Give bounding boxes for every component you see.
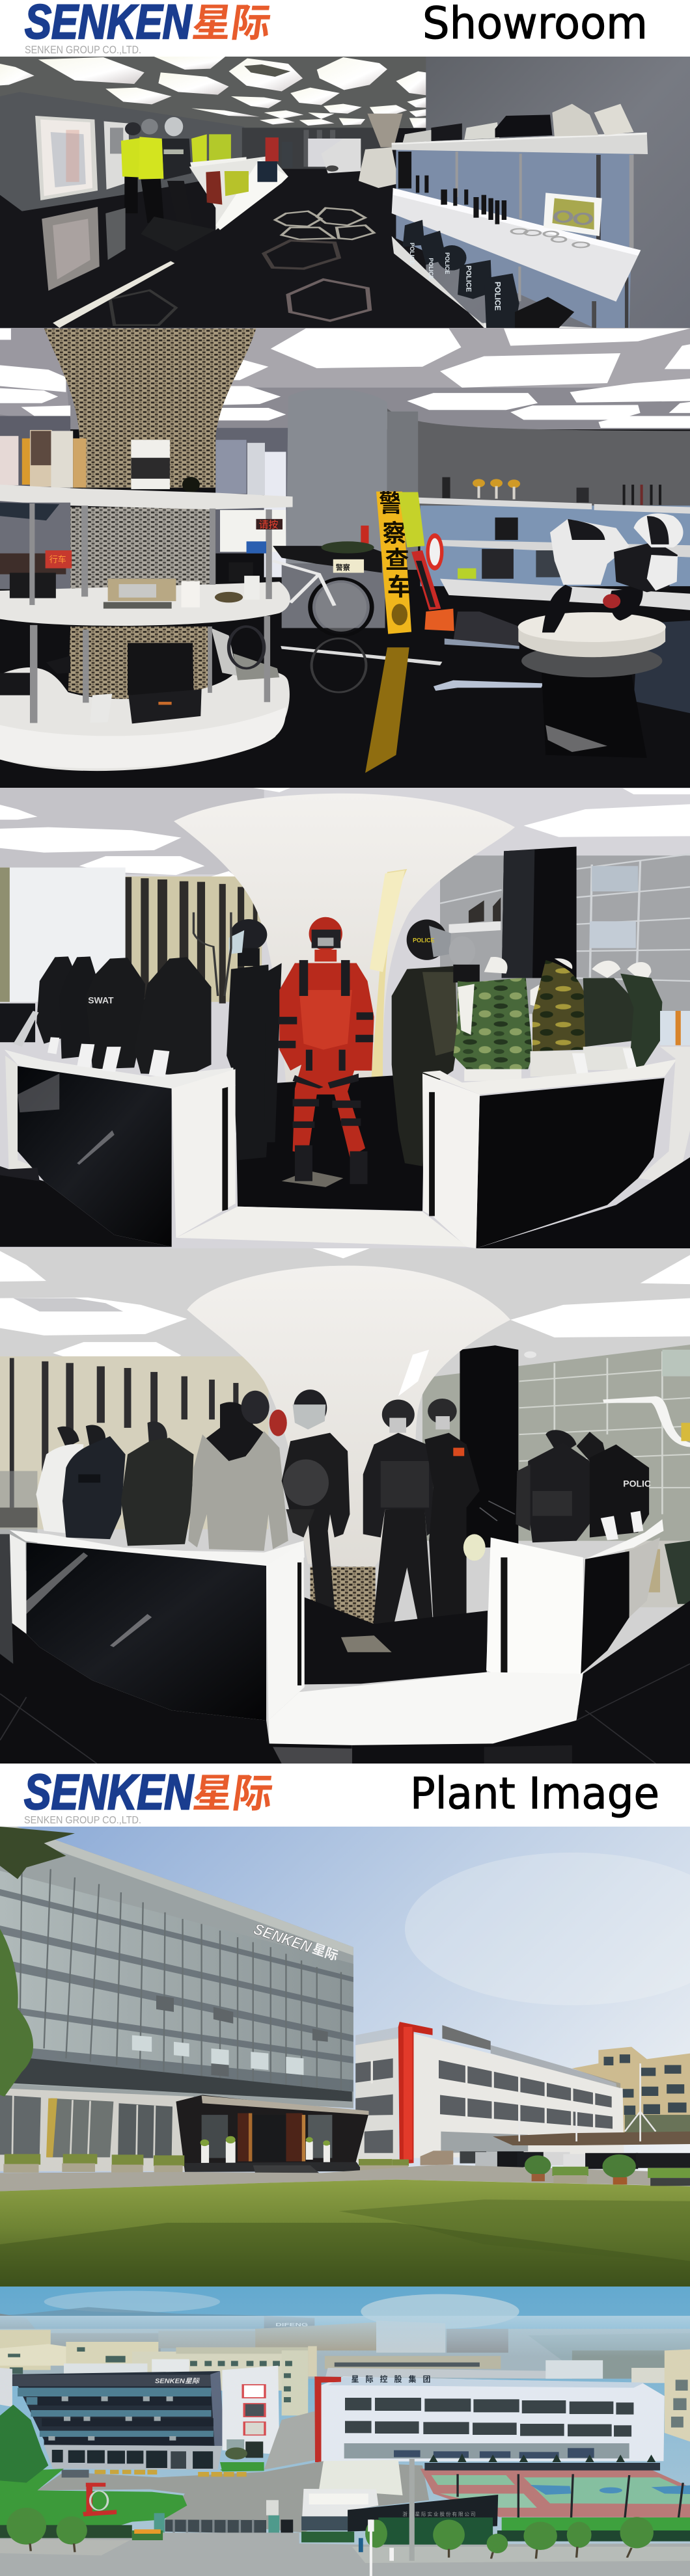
black company name wedge wall: 浙江星际实业股份有限公司 (403, 2510, 476, 2517)
photo: showroom aisle with hexagon ceiling and shelves (0, 57, 690, 328)
ceiling (0, 57, 427, 128)
black riot suit mannequin (282, 1389, 350, 1657)
logo: Senken: SENKEN GROUP CO.,LTD. (24, 1815, 141, 1826)
white annex with red windows (222, 2366, 279, 2458)
red LED sign (256, 519, 283, 530)
red riot suit mannequin (278, 917, 374, 1184)
paved road (0, 2165, 652, 2191)
white base front and black floor (0, 1157, 690, 1248)
far end of room (242, 127, 392, 169)
white funnel column (174, 794, 515, 1166)
yellow police check sign: 查 (385, 541, 409, 576)
wall map display (35, 116, 98, 200)
tan building (572, 2046, 690, 2133)
tactical vests right (516, 1430, 651, 1542)
red stripe (398, 2022, 433, 2164)
ceiling hexagon lights (0, 1248, 690, 1380)
lower shelf with police shields: POLICE (428, 258, 434, 280)
header: showroom (25, 0, 648, 56)
basketball courts (421, 2454, 690, 2518)
glass cases left (0, 1471, 37, 1571)
header: plant image (0, 1761, 690, 1827)
distant city (0, 2314, 690, 2385)
vertical poles (456, 152, 633, 328)
right wall display shelves (418, 477, 690, 610)
black riot suit figure left (227, 919, 282, 1161)
traffic equipment (398, 492, 454, 631)
hexagon lights (0, 57, 426, 127)
trees on the left (0, 1827, 75, 2097)
tactical police mannequins (363, 1399, 486, 1652)
top shelf with gloves and white armour (392, 104, 648, 154)
tactical vests on left: SWAT (88, 995, 114, 1006)
row of street trees (7, 2508, 654, 2553)
center floor (236, 1073, 424, 1211)
black pillar (502, 846, 577, 978)
white funnel column (187, 1266, 510, 1638)
air vent (244, 64, 290, 77)
tactical vests right: POLIC (623, 1478, 651, 1488)
dark lower glass band (13, 2058, 352, 2102)
windows row 1 (345, 2398, 633, 2437)
lower shelf with police shields: POLICE (409, 243, 415, 264)
white wave shelf (603, 1396, 690, 1447)
ground floor with blinds (0, 2088, 193, 2171)
green lawn with sculpture (0, 2405, 264, 2527)
tactical vests on left (36, 956, 211, 1075)
window rows (355, 2058, 613, 2153)
white main factory (314, 2373, 665, 2462)
entrance canopy and doors (176, 2095, 369, 2173)
black floor (0, 1534, 690, 1764)
hexagon ceiling reflections on the floor (110, 208, 374, 325)
curtains (0, 1356, 268, 1529)
lower shelf with police shields: POLICE (493, 282, 503, 311)
white shelf with shields (449, 898, 501, 933)
yellow police check sign: 车 (387, 567, 411, 602)
dark glass office building: SENKEN星际 (155, 2377, 200, 2385)
photo: black tactical uniforms and jackets display (0, 1248, 690, 1764)
rooftop characters: 星际控股集团 (351, 2373, 430, 2384)
logo: Senken: 星际 (189, 1761, 277, 1819)
white floor strip (53, 261, 174, 328)
main glass office building (0, 1821, 353, 2108)
gate and entry (154, 2500, 293, 2534)
mosaic column (44, 329, 256, 703)
ceiling hexagon lights (0, 788, 690, 880)
windows and curtains (0, 868, 126, 1002)
white tensile canopy (319, 2460, 403, 2495)
shrubs and planters on the right (525, 2154, 690, 2186)
hexagon ceiling lights (0, 329, 690, 428)
hedges in planters (3, 2154, 409, 2173)
lit mosaic strip (365, 869, 407, 1163)
dark glass office building (12, 2371, 225, 2470)
white base front (268, 1672, 581, 1745)
company sign: 星际 (310, 1938, 341, 1965)
police bicycle (229, 526, 382, 668)
police bicycle: 警察 (336, 562, 350, 572)
right counter (422, 1011, 690, 1248)
camouflage vests on white mannequins (453, 957, 662, 1081)
wall niche (104, 121, 130, 189)
brochures on the top shelf (0, 430, 265, 495)
road between buildings (264, 2411, 321, 2470)
company sign (251, 1920, 341, 1965)
photo: round display shelves, police motorcycle and yellow sign (0, 328, 690, 788)
yellow reflective jackets on mannequins (121, 117, 231, 226)
display counter (189, 156, 288, 230)
black stands (193, 912, 231, 996)
lower shelf with police shields: POLICE (465, 265, 473, 292)
white workshop building (355, 2022, 624, 2164)
photo: aerial view of the company campus (0, 2287, 690, 2576)
fog over distant city (0, 2316, 690, 2357)
distant city: DIFENG (275, 2323, 308, 2328)
photo: round display shelves, police motorcycle and yellow sign: 请按 (258, 518, 278, 531)
shelf support poles (29, 503, 272, 723)
far floor right (625, 1541, 690, 1607)
carport and parked cars (421, 2063, 690, 2169)
dark floor bands (0, 1889, 353, 2091)
logo: Senken: SENKEN (24, 1765, 195, 1820)
photo: round display shelves, police motorcycle and yellow sign: 行车 (49, 552, 66, 565)
paved yard (37, 2461, 429, 2532)
left counter (0, 1004, 236, 1247)
tile wall (422, 1345, 690, 1541)
floor reflections (281, 611, 690, 773)
green hedges and lawn along road (0, 2517, 690, 2545)
back wall left (215, 428, 288, 554)
lawn (0, 2180, 690, 2287)
helmets behind (241, 1391, 287, 1436)
right wall (426, 57, 690, 328)
yellow police check sign: 察 (382, 513, 406, 548)
yellow police check sign (376, 483, 411, 634)
logo: Senken (25, 0, 275, 56)
logo: Senken: SENKEN GROUP CO.,LTD. (25, 44, 141, 56)
heading: Plant Image: Plant Image (410, 1768, 659, 1819)
top shelf ring (0, 485, 293, 509)
black marble pillar (460, 1345, 518, 1548)
floor reflections of the wall (42, 207, 100, 291)
black company name wedge wall (348, 2495, 498, 2532)
center floor (305, 1598, 488, 1684)
left counter (10, 1530, 305, 1721)
photo: company building exterior with lawn (0, 1827, 690, 2287)
tile wall (440, 855, 690, 1014)
ceiling (0, 328, 690, 429)
distant mannequins and white car (266, 114, 403, 188)
lower shelf with police shields: POLICE (444, 252, 450, 274)
camouflage soldier (392, 919, 480, 1166)
red stripe (314, 2376, 341, 2462)
street lamp posts (359, 2459, 415, 2576)
middle shelf with batons, frame and handcuffs (392, 152, 641, 302)
road and sidewalk (0, 2532, 690, 2576)
yellow police check sign: 警 (379, 483, 403, 518)
left wall (0, 92, 244, 211)
middle shelf ring (0, 562, 290, 626)
lower shelf with police shields (392, 220, 594, 328)
motorcycle on round platform (518, 513, 683, 677)
right end of floor and blue backing (396, 150, 633, 328)
lower glazed row (344, 2443, 629, 2458)
cream buildings back left (0, 2330, 690, 2441)
logo: Senken (24, 1761, 277, 1826)
window mullions (20, 1856, 341, 2091)
left dark backdrop and items (0, 503, 70, 589)
jackets on stands (36, 1402, 288, 1551)
camouflage soldier: POLICE (413, 937, 435, 943)
back wall right (387, 409, 690, 516)
right counter (486, 1519, 663, 1707)
photo: riot and camouflage gear display around white column (0, 788, 690, 1248)
gray column (286, 389, 387, 564)
company sign: SENKEN (251, 1920, 314, 1957)
base ring (0, 628, 290, 771)
guard house (301, 2489, 378, 2530)
